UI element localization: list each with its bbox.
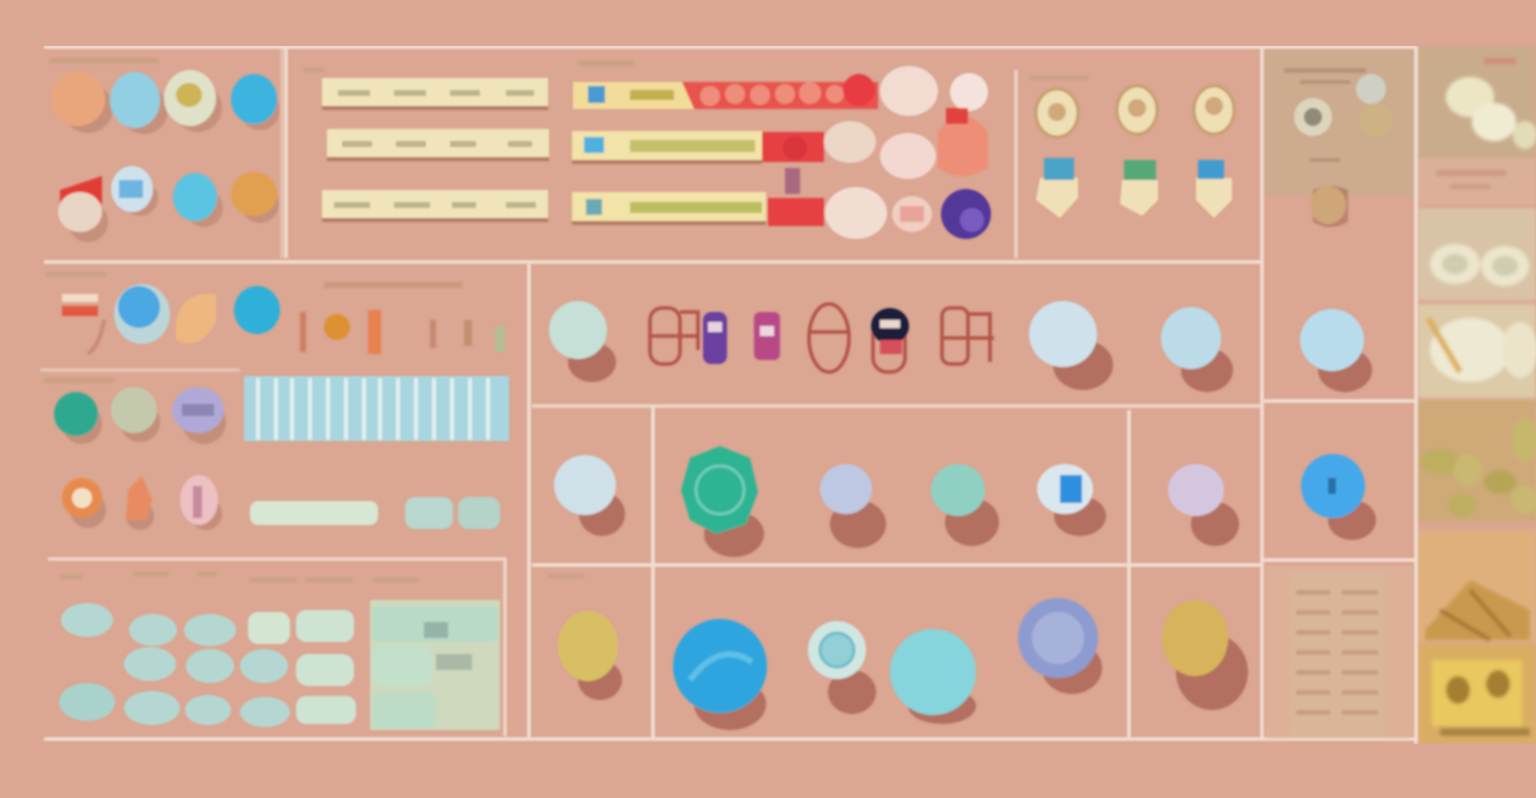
panel tint: top right (1265, 50, 1415, 196)
panel: bottom-left pill chart (59, 572, 500, 730)
panel: middle-left row (46, 272, 505, 354)
panel: top-centre-right capsules (1030, 76, 1234, 218)
right side image strip (1418, 46, 1536, 744)
panel grid lines (40, 46, 1416, 744)
panel: bottom-right table (1266, 566, 1412, 738)
panel: top-centre label bars (304, 68, 549, 222)
panel: top-centre red bars (572, 61, 991, 239)
panel: centre pills row 1 (549, 301, 1372, 392)
panel: middle-left blister (44, 376, 509, 530)
panel: centre pills row 3 (548, 574, 1248, 730)
panel: centre pills row 2 (554, 446, 1376, 557)
panel: top-right small pills (1284, 68, 1393, 227)
panel: top-left round tablets (50, 58, 280, 242)
